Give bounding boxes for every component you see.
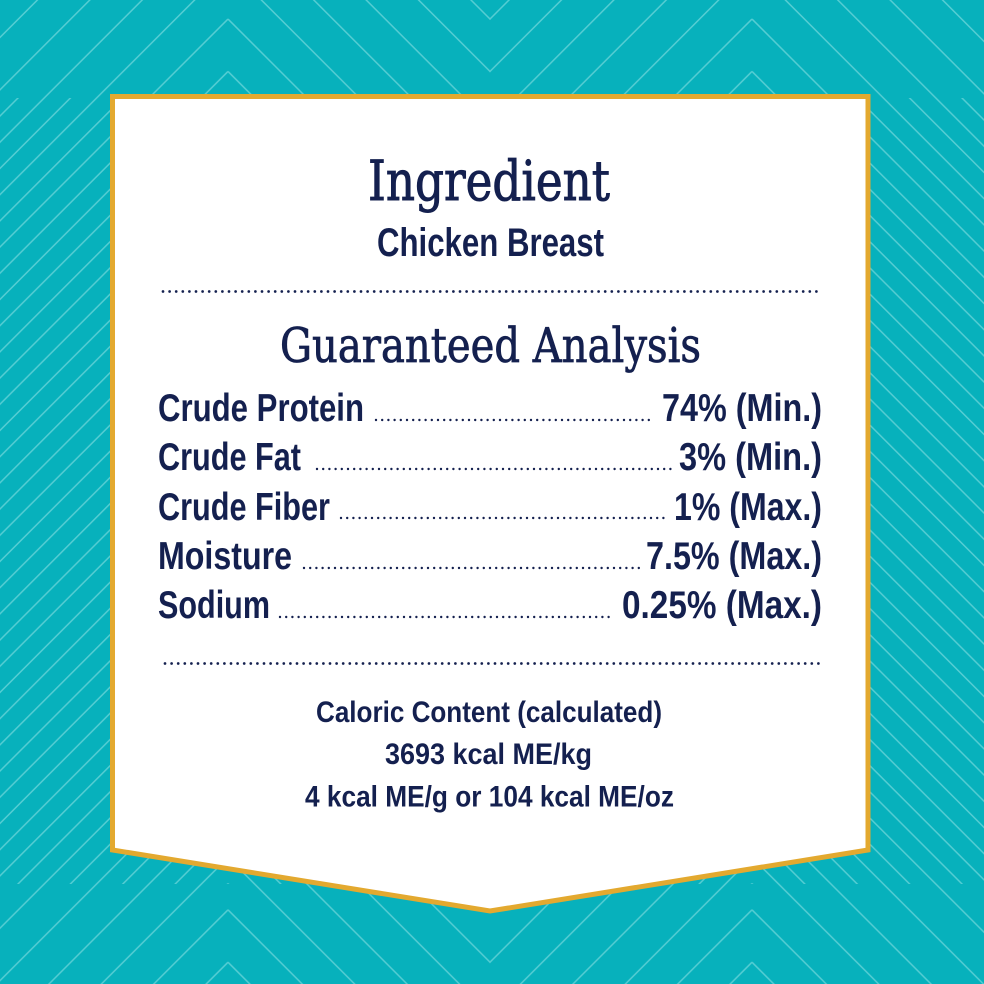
text: caloric content	[305, 696, 674, 814]
row: Crude Protein: Crude Protein	[158, 387, 364, 430]
text: caloric content: 4 kcal ME/g or 104 kcal ME/oz	[305, 780, 674, 814]
row: Sodium: 0.25% (Max.)	[622, 584, 822, 627]
row: Crude Fiber: Crude Fiber	[158, 486, 330, 529]
row: Crude Fat: 3% (Min.)	[679, 436, 822, 479]
row: Crude Protein	[158, 387, 822, 430]
row: Crude Fiber: 1% (Max.)	[674, 486, 822, 529]
row: Sodium: Sodium	[158, 584, 270, 627]
row: Moisture: 7.5% (Max.)	[646, 535, 822, 578]
heading: Ingredient: Ingredient	[368, 149, 610, 213]
panel: white pennant with gold border	[112, 96, 868, 911]
row: Crude Protein: 74% (Min.)	[662, 387, 822, 430]
row: Sodium	[158, 584, 822, 627]
row: Moisture	[158, 535, 822, 578]
text: caloric content: 3693 kcal ME/kg	[385, 738, 592, 771]
row: Crude Fat: Crude Fat	[158, 436, 301, 479]
text: Chicken Breast: Chicken Breast	[377, 221, 604, 265]
row: Crude Fat	[158, 436, 822, 479]
divider: top dotted line	[163, 290, 819, 293]
text: caloric content: Caloric Content (calculated)	[316, 696, 662, 729]
heading: Guaranteed Analysis: Guaranteed Analysis	[280, 318, 701, 374]
row: Moisture: Moisture	[158, 535, 292, 578]
divider: lower dotted line	[165, 662, 822, 665]
row: Crude Fiber	[158, 486, 822, 529]
